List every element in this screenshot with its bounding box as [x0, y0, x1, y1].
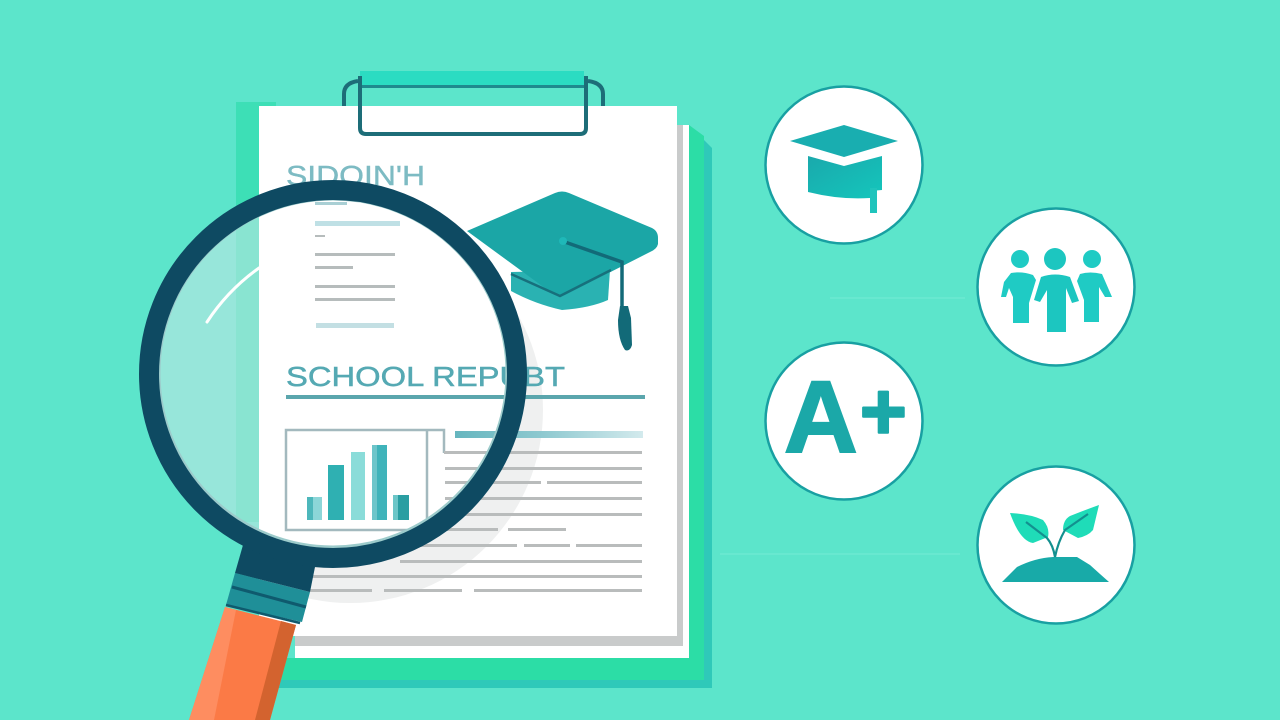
bar 3 — [351, 452, 365, 520]
handle — [189, 607, 296, 720]
clipboard clip — [344, 71, 603, 107]
left leaf — [1010, 513, 1048, 543]
clipboard board — [236, 102, 712, 688]
icon circle: graduation cap — [766, 86, 922, 244]
magnifier shadow — [308, 316, 543, 603]
lens ring — [149, 190, 517, 558]
section heading: school report: SCHOOL REPUBT — [286, 361, 565, 392]
neck — [235, 545, 316, 592]
lens lines — [315, 202, 400, 328]
lens inner rim — [159, 199, 507, 547]
cap base — [511, 270, 610, 310]
cap body — [808, 156, 882, 198]
lens highlight — [207, 268, 259, 322]
person right — [1077, 250, 1112, 322]
faint connector lines — [720, 298, 965, 554]
bar 5 — [393, 495, 409, 520]
lens white paper area — [259, 217, 506, 546]
cap board — [467, 192, 658, 296]
bar chart — [286, 430, 444, 530]
front sheet — [259, 106, 677, 636]
report top heading: SIDOIN'H — [286, 160, 425, 191]
bar 4 — [372, 445, 387, 520]
grade text: + — [860, 367, 907, 456]
grade text: A — [784, 360, 858, 474]
bar 2 — [328, 465, 344, 520]
cap fold — [511, 270, 611, 296]
mound — [1002, 557, 1109, 582]
clip frame — [360, 76, 586, 134]
person left — [1001, 250, 1036, 323]
magnifying glass — [149, 190, 517, 720]
chart frame — [286, 430, 444, 530]
stem and veins — [1026, 514, 1088, 557]
right leaf — [1063, 505, 1099, 538]
icon circle: A+ grade — [766, 342, 922, 500]
bar 1 — [307, 497, 322, 520]
cap tassel — [870, 188, 877, 213]
person middle — [1034, 248, 1079, 332]
collar — [226, 573, 310, 623]
graduation cap illustration — [467, 192, 658, 350]
report paper — [259, 106, 689, 658]
body text lines — [310, 431, 643, 592]
grade text — [784, 360, 907, 474]
icon circle: seedling — [978, 466, 1134, 624]
cap top — [790, 125, 898, 157]
cap tassel — [559, 237, 632, 350]
heading rule — [286, 395, 645, 399]
infographic: school report under magnifying glass — [139, 71, 1136, 720]
sheet edge shadow — [295, 125, 683, 646]
lens glass — [160, 217, 259, 529]
icon circle: people — [978, 208, 1134, 366]
back sheet — [295, 125, 689, 658]
